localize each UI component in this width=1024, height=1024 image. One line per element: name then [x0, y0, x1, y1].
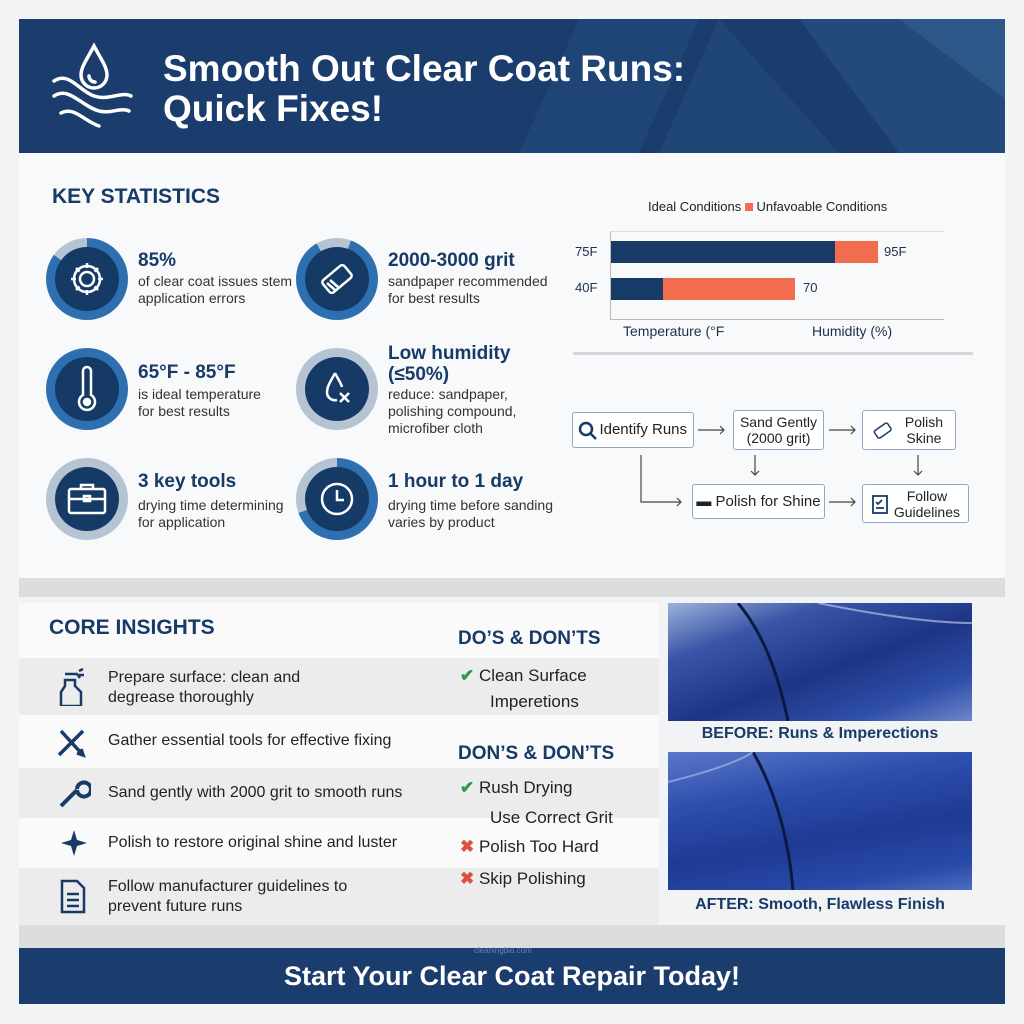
panel: do's and don'ts: ✖ Polish Too Hard	[460, 837, 599, 856]
stat: drying time: 1 hour to 1 day	[388, 471, 523, 492]
stat: temperature: for best results	[138, 403, 230, 419]
title	[163, 48, 685, 129]
stat: temperature	[46, 348, 261, 430]
insight row 1: Prepare surface: clean and	[108, 669, 300, 686]
insight row 3: Sand gently with 2000 grit to smooth runs	[108, 784, 402, 801]
step: identify runs	[572, 412, 694, 448]
stat: humidity: polishing compound,	[388, 403, 516, 419]
stat: drying time: varies by product	[388, 514, 495, 530]
insight row 4	[19, 818, 659, 868]
stat: grit	[296, 238, 548, 320]
footer banner	[19, 948, 1005, 1004]
bar chart: Humidity (%)	[812, 323, 892, 339]
panel: do's and don'ts: Imperetions	[490, 692, 579, 711]
insight row 5: Follow manufacturer guidelines to	[108, 878, 347, 895]
bar chart: 95F	[884, 244, 906, 259]
step: polish skine	[862, 410, 956, 450]
photo: before	[668, 603, 972, 721]
insight row 5	[19, 868, 659, 925]
separator band	[19, 925, 1005, 948]
stat: tools: drying time determining	[138, 497, 284, 513]
insight row 3	[19, 768, 659, 818]
panel: do's and don'ts: ✖ Skip Polishing	[460, 869, 586, 888]
bar chart	[575, 199, 944, 339]
stat: grit: for best results	[388, 290, 480, 306]
stat: grit: sandpaper recommended	[388, 273, 548, 289]
caption: before: BEFORE: Runs & Imperections	[702, 725, 938, 742]
stat: drying time	[296, 458, 553, 540]
stat: humidity: microfiber cloth	[388, 420, 483, 436]
panel: do's and don'ts: ✔ Clean Surface	[460, 666, 587, 685]
title: Quick Fixes!	[163, 88, 383, 129]
stat: humidity: Low humidity	[388, 343, 510, 364]
bar chart: 75F	[575, 244, 597, 259]
stat: 85%: of clear coat issues stem	[138, 273, 292, 289]
step: follow guidelines: Follow	[907, 488, 947, 504]
insight row 2	[19, 715, 659, 768]
step: identify runs: Identify Runs	[599, 421, 687, 438]
step: sand gently: Sand Gently	[740, 414, 817, 430]
stat: 85%: 85%	[138, 250, 176, 271]
insight row 1	[19, 658, 659, 715]
caption: after: AFTER: Smooth, Flawless Finish	[695, 896, 945, 913]
separator band	[19, 578, 1005, 597]
stat: tools	[46, 458, 284, 540]
stat: temperature: is ideal temperature	[138, 386, 261, 402]
stat: humidity	[296, 343, 516, 436]
icon: water drop with waves	[52, 42, 133, 128]
step: polish skine: Polish	[905, 414, 943, 430]
stat: grit: 2000-3000 grit	[388, 250, 515, 271]
heading: key statistics: KEY STATISTICS	[52, 185, 220, 208]
step: follow guidelines: Guidelines	[894, 504, 960, 520]
legend: Ideal Conditions Unfavoable Conditions	[648, 199, 887, 214]
panel: key statistics	[19, 153, 1005, 578]
panel: do's and don'ts	[458, 628, 614, 888]
bar chart: Temperature (°F	[623, 323, 724, 339]
arrows	[640, 426, 922, 506]
stat: 85%	[46, 238, 292, 320]
step: polish for shine	[692, 484, 825, 519]
stat: humidity: (≤50%)	[388, 364, 449, 385]
insight row 2: Gather essential tools for effective fixing	[108, 732, 391, 749]
flowchart	[572, 410, 969, 523]
stat: tools: 3 key tools	[138, 471, 236, 492]
header banner	[19, 19, 1005, 153]
panel: do's and don'ts: DO’S & DON’TS	[458, 628, 601, 649]
insight row 1: degrease thoroughly	[108, 689, 254, 706]
step: polish for shine: ▬ Polish for Shine	[696, 492, 821, 510]
footer banner: cleaningbio.com	[474, 946, 532, 955]
stat: humidity: reduce: sandpaper,	[388, 386, 508, 402]
panel: core insights	[19, 603, 659, 925]
step: sand gently	[733, 410, 824, 450]
stat: drying time: drying time before sanding	[388, 497, 553, 513]
panel: do's and don'ts: Use Correct Grit	[490, 808, 613, 827]
title: Smooth Out Clear Coat Runs:	[163, 48, 685, 89]
footer banner: Start Your Clear Coat Repair Today!	[284, 961, 740, 991]
step: polish skine: Skine	[906, 430, 941, 446]
stat: temperature: 65°F - 85°F	[138, 362, 236, 383]
heading: core insights: CORE INSIGHTS	[49, 616, 215, 639]
insight row 5: prevent future runs	[108, 898, 242, 915]
panel: do's and don'ts: ✔ Rush Drying	[460, 778, 573, 797]
panel: do's and don'ts: DON’S & DON’TS	[458, 743, 614, 764]
stat: tools: for application	[138, 514, 225, 530]
bar chart: 40F	[575, 280, 597, 295]
stat: 85%: application errors	[138, 290, 245, 306]
step: follow guidelines	[862, 484, 969, 523]
step: sand gently: (2000 grit)	[747, 430, 810, 446]
insight row 4: Polish to restore original shine and luster	[108, 834, 397, 851]
bar chart: 70	[803, 280, 817, 295]
photo: after	[668, 752, 972, 890]
